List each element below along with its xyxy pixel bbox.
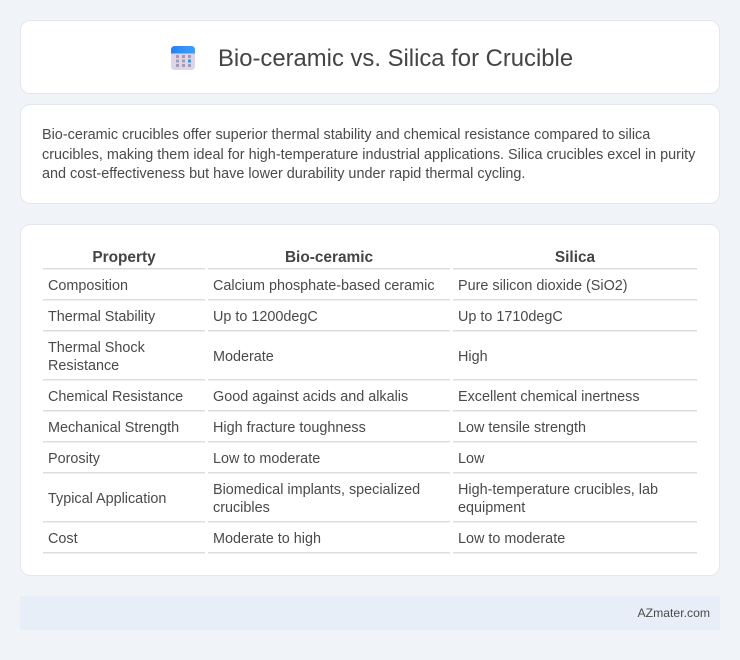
panel: comparison table xyxy=(20,224,720,576)
row: Thermal Shock Resistance: Thermal Shock xyxy=(48,340,145,356)
row: Typical Application: equipment xyxy=(458,500,525,516)
comparison table xyxy=(43,249,697,554)
row: Thermal Shock Resistance xyxy=(43,340,697,381)
row: Chemical Resistance: Good against acids and alkalis xyxy=(213,389,408,405)
row: Cost: Moderate to high xyxy=(213,531,321,547)
row: Porosity: Low xyxy=(458,451,484,467)
row: Chemical Resistance xyxy=(43,389,697,412)
row: Porosity: Low to moderate xyxy=(213,451,320,467)
row: Typical Application: High-temperature crucibles, lab xyxy=(458,482,658,498)
table header row: Bio-ceramic xyxy=(285,249,373,266)
row: Cost: Low to moderate xyxy=(458,531,565,547)
row: Mechanical Strength: Mechanical Strength xyxy=(48,420,179,436)
panel: summary xyxy=(20,104,720,204)
summary text: Bio-ceramic crucibles offer superior thermal stability and chemical resistance compared to silica xyxy=(42,127,650,143)
row: Thermal Shock Resistance: High xyxy=(458,349,488,365)
icon: calendar grid xyxy=(171,46,195,70)
row: Chemical Resistance: Excellent chemical inertness xyxy=(458,389,640,405)
row: Mechanical Strength: High fracture toughness xyxy=(213,420,366,436)
row: Thermal Shock Resistance: Moderate xyxy=(213,349,274,365)
row: Cost: Cost xyxy=(48,531,78,547)
row: Thermal Stability: Up to 1200degC xyxy=(213,309,318,325)
row: Thermal Stability xyxy=(43,309,697,332)
row: Porosity xyxy=(43,451,697,474)
table header row xyxy=(43,249,697,270)
footer credit: AZmater.com xyxy=(638,606,710,620)
table header row: Silica xyxy=(555,249,595,266)
row: Composition xyxy=(43,278,697,301)
summary text: and cost-effectiveness but have lower durability under rapid thermal cycling. xyxy=(42,166,525,182)
row: Typical Application: Typical Application xyxy=(48,491,166,507)
row: Thermal Stability: Thermal Stability xyxy=(48,309,155,325)
row: Porosity: Porosity xyxy=(48,451,100,467)
row: Composition: Pure silicon dioxide (SiO2) xyxy=(458,278,628,294)
summary text xyxy=(42,127,696,182)
row: Chemical Resistance: Chemical Resistance xyxy=(48,389,183,405)
panel: title card xyxy=(20,20,720,94)
row: Mechanical Strength: Low tensile strength xyxy=(458,420,586,436)
row: Typical Application xyxy=(43,482,697,523)
row: Composition: Composition xyxy=(48,278,128,294)
row: Thermal Shock Resistance: Resistance xyxy=(48,358,119,374)
row: Composition: Calcium phosphate-based ceramic xyxy=(213,278,435,294)
title: Bio-ceramic vs. Silica for Crucible xyxy=(218,45,573,72)
row: Typical Application: Biomedical implants, specialized xyxy=(213,482,420,498)
footer bar xyxy=(20,596,720,630)
row: Mechanical Strength xyxy=(43,420,697,443)
row: Typical Application: crucibles xyxy=(213,500,270,516)
row: Thermal Stability: Up to 1710degC xyxy=(458,309,563,325)
table header row: Property xyxy=(92,249,156,266)
summary text: crucibles, making them ideal for high-temperature industrial applications. Silica crucibles excel in purity xyxy=(42,147,695,163)
row: Cost xyxy=(43,531,697,554)
